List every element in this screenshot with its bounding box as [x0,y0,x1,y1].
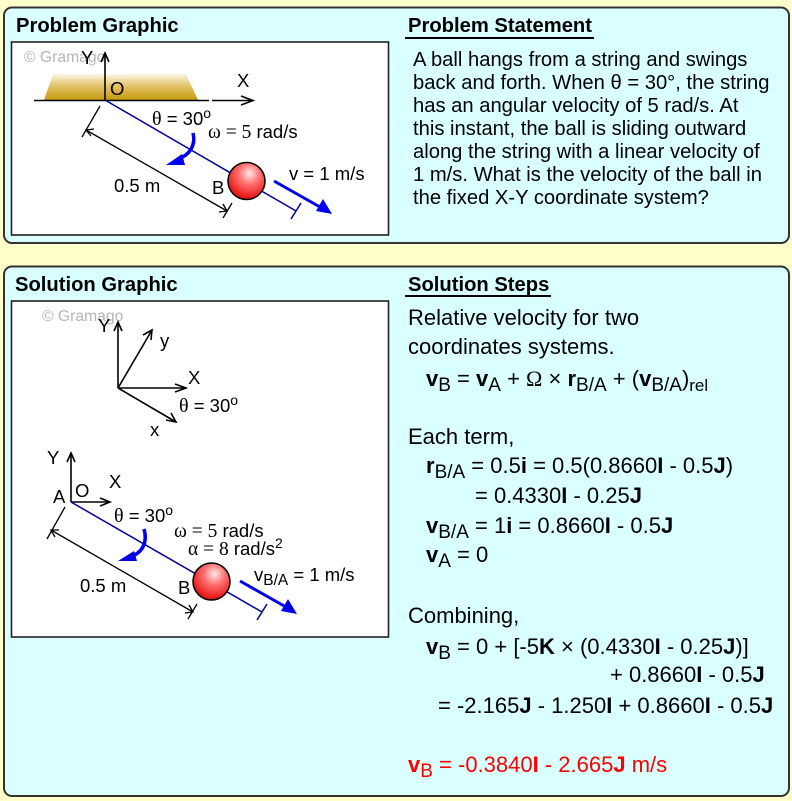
result: I - 2.665J m/s [533,752,667,777]
velocity arrow [240,581,297,614]
theta label: o [165,502,173,518]
velocity label: B/A [263,572,289,589]
solution steps text: B [438,643,451,664]
axis labels: B [178,577,190,598]
solution steps text: v [426,513,439,538]
string [105,100,301,219]
result: v [408,752,421,777]
solution steps text: B [438,375,451,396]
solution steps text: = -2.165J - 1.250I + 0.8660I - 0.5J [438,693,773,718]
axis labels: A [53,486,66,507]
axis labels: B [212,177,224,198]
heading: Problem Graphic: Problem Graphic [16,15,179,37]
solution steps text: v [476,366,489,391]
solution steps text: K × (0.4330I - 0.25J)] [539,634,749,659]
problem statement text: the fixed X-Y coordinate system? [413,187,709,209]
result: = -0.3840 [433,752,533,777]
axes labels [98,315,238,440]
solution steps text: B/A [438,522,469,543]
omega label: ω = 5 rad/s [174,520,264,542]
problem statement text: 1 m/s. What is the velocity of the ball in [413,164,762,186]
theta label: θ = 30 [114,505,165,527]
velocity label: = 1 m/s [288,564,355,585]
rotation arrow [166,133,194,165]
dimension label: 0.5 m [114,175,160,196]
solution steps text: Ω × r [526,366,576,391]
X axis [212,96,253,105]
solution steps text: = 1 [469,513,506,538]
ground support [44,74,198,100]
solution steps text: v [426,366,439,391]
solution steps text: v [639,366,652,391]
solution steps text: v [426,542,439,567]
solution steps text: B/A [651,375,682,396]
problem statement text: this instant, the ball is sliding outward [413,118,746,140]
result: B [420,761,433,782]
heading: Solution Graphic: Solution Graphic [15,274,178,296]
solution steps text: = 0.4330I - 0.25J [475,483,642,508]
solution steps text: r [426,453,435,478]
solution steps text: = 0 + [-5 [451,634,539,659]
axis labels: Y [81,47,93,68]
velocity label: v [254,564,263,585]
solution steps text [408,305,773,718]
solution steps text: B/A [576,375,607,396]
axis labels: O [110,78,124,99]
problem statement text: along the string with a linear velocity of [413,141,760,163]
solution steps text: v [426,634,439,659]
axes labels: y [160,330,170,351]
dimension label: 0.5 m [80,575,126,596]
heading: Solution Steps: Solution Steps [408,274,549,296]
axis labels: X [109,471,121,492]
dimension 0.5 m [47,507,197,619]
solution steps text: i = 0.5(0.8660I - 0.5J) [521,453,733,478]
axes labels: X [188,367,200,388]
solution steps text: ) [682,366,689,391]
solution steps text: i = 0.8660I - 0.5J [506,513,673,538]
Y axis [67,453,110,506]
problem statement text: has an angular velocity of 5 rad/s. At [413,95,739,117]
axis labels: X [237,70,249,91]
problem statement text: back and forth. When θ = 30°, the string [413,72,770,94]
solution steps text: B/A [435,462,466,483]
solution steps text: Combining, [408,603,519,628]
theta label: θ = 30 [152,108,203,130]
heading: Problem Statement: Problem Statement [408,15,592,37]
coordinate axes [114,322,186,422]
ball [193,563,230,600]
Y axis [101,53,109,100]
ball [228,162,265,200]
axes labels: θ = 30 [179,395,230,417]
dimension 0.5 m [82,106,232,218]
solution steps text: A [438,551,451,572]
solution steps text: = [451,366,476,391]
axes labels: Y [98,315,110,336]
solution steps text: = 0 [451,542,488,567]
solution steps text: Relative velocity for two [408,305,639,330]
graphic: solution diagram [12,301,388,637]
solution steps text: = 0.5 [465,453,521,478]
omega label: ω = 5 rad/s [208,121,298,143]
axes labels: x [150,419,160,440]
watermark: © Gramago [42,308,124,325]
theta label: o [203,105,211,121]
rotation arrow [118,529,145,561]
panel: solution [4,266,789,796]
problem statement text: A ball hangs from a string and swings [413,49,747,71]
graphic: problem diagram [12,42,388,235]
alpha label: 2 [275,535,283,551]
axes labels: o [230,392,238,408]
alpha label: α = 8 rad/s [188,538,275,560]
solution steps text: + [501,366,526,391]
axis labels [81,47,249,198]
solution steps text: + ( [607,366,640,391]
axis labels: O [75,480,89,501]
solution steps text: coordinates systems. [408,334,615,359]
panel: problem [4,8,789,243]
solution steps text: + 0.8660I - 0.5J [610,662,765,687]
velocity label: v = 1 m/s [289,163,365,184]
velocity arrow [274,181,332,214]
string [71,502,267,620]
solution steps text: Each term, [408,424,514,449]
solution steps text: A [488,375,501,396]
watermark: © Gramago [24,49,106,66]
axis labels [47,447,190,598]
solution steps text: rel [689,376,708,395]
axis labels: Y [47,447,59,468]
